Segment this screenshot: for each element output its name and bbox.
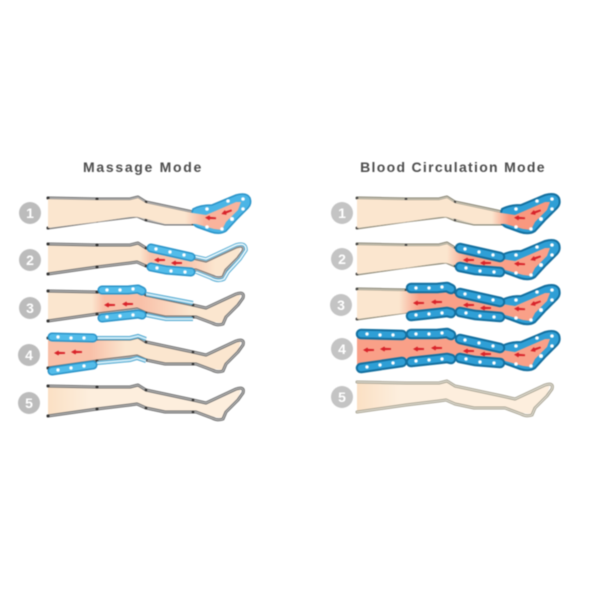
step 5: all cuffs released: 5 [25,395,33,411]
step 2: calf cuff inflated [19,242,246,280]
step 2: foot and calf cuffs inflated [331,240,560,279]
title: Massage Mode: Massage Mode [83,159,203,175]
step 3: knee cuff inflated [19,287,243,325]
step 1: foot cuff inflated: 1 [338,205,346,221]
step 5: all cuffs released [18,384,243,420]
step 1: foot cuff inflated [19,194,251,233]
step 2: foot and calf cuffs inflated: 2 [338,251,346,267]
step 2: calf cuff inflated: 2 [26,252,34,268]
step 5: all cuffs released: 5 [338,389,346,405]
title: Blood Circulation Mode: Blood Circulation Mode [360,159,546,175]
step 4: all cuffs inflated [331,331,560,370]
step 4: thigh cuff inflated: 4 [25,347,33,363]
step 1: foot cuff inflated: 1 [26,205,34,221]
step 3: foot, calf and knee cuffs inflated: 3 [337,297,345,313]
step 5: all cuffs released [331,381,552,416]
step 4: thigh cuff inflated [18,335,243,372]
step 3: knee cuff inflated: 3 [26,300,34,316]
panel: blood circulation mode [330,194,560,416]
step 1: foot cuff inflated [331,194,560,233]
step 3: foot, calf and knee cuffs inflated [330,285,560,324]
step 4: all cuffs inflated: 4 [338,341,346,357]
panel: massage mode [18,194,251,420]
